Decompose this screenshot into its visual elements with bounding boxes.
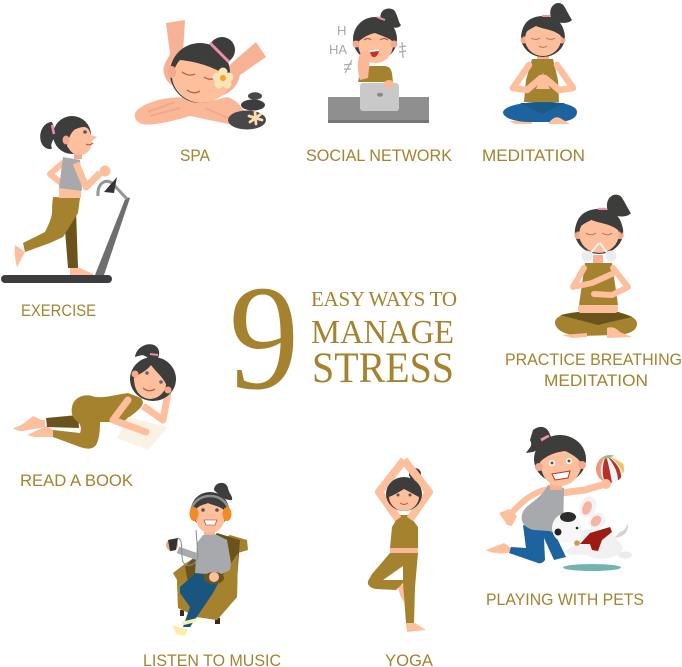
panel: exercise illustration (1, 116, 130, 283)
label: practice breathing meditation (505, 350, 682, 390)
label: read a book: READ A BOOK (20, 471, 134, 490)
panel: meditation illustration (503, 3, 577, 124)
panel: yoga illustration (368, 460, 429, 632)
title: 9 easy ways to manage stress: MANAGE (311, 314, 454, 351)
panel: spa illustration (135, 20, 266, 130)
title: 9 easy ways to manage stress: EASY WAYS TO (311, 287, 457, 311)
title: 9 easy ways to manage stress: STRESS (312, 345, 454, 392)
label: playing with pets: PLAYING WITH PETS (486, 590, 644, 609)
label: social network: SOCIAL NETWORK (306, 146, 453, 165)
label: meditation: MEDITATION (482, 146, 585, 165)
panel: playing with pets illustration (486, 427, 632, 571)
panel: read a book illustration (13, 344, 176, 450)
label: practice breathing meditation: MEDITATION (544, 371, 648, 390)
label: exercise: EXERCISE (21, 301, 96, 320)
title: 9 easy ways to manage stress: 9 (229, 255, 299, 421)
panel: social network illustration: HA (329, 42, 347, 57)
label: spa: SPA (180, 146, 211, 165)
panel: listen to music illustration (166, 483, 248, 636)
panel: practice breathing meditation illustration (555, 195, 637, 338)
title: 9 easy ways to manage stress (229, 255, 457, 421)
panel: social network illustration: H (337, 23, 346, 38)
panel: social network illustration (328, 8, 429, 123)
